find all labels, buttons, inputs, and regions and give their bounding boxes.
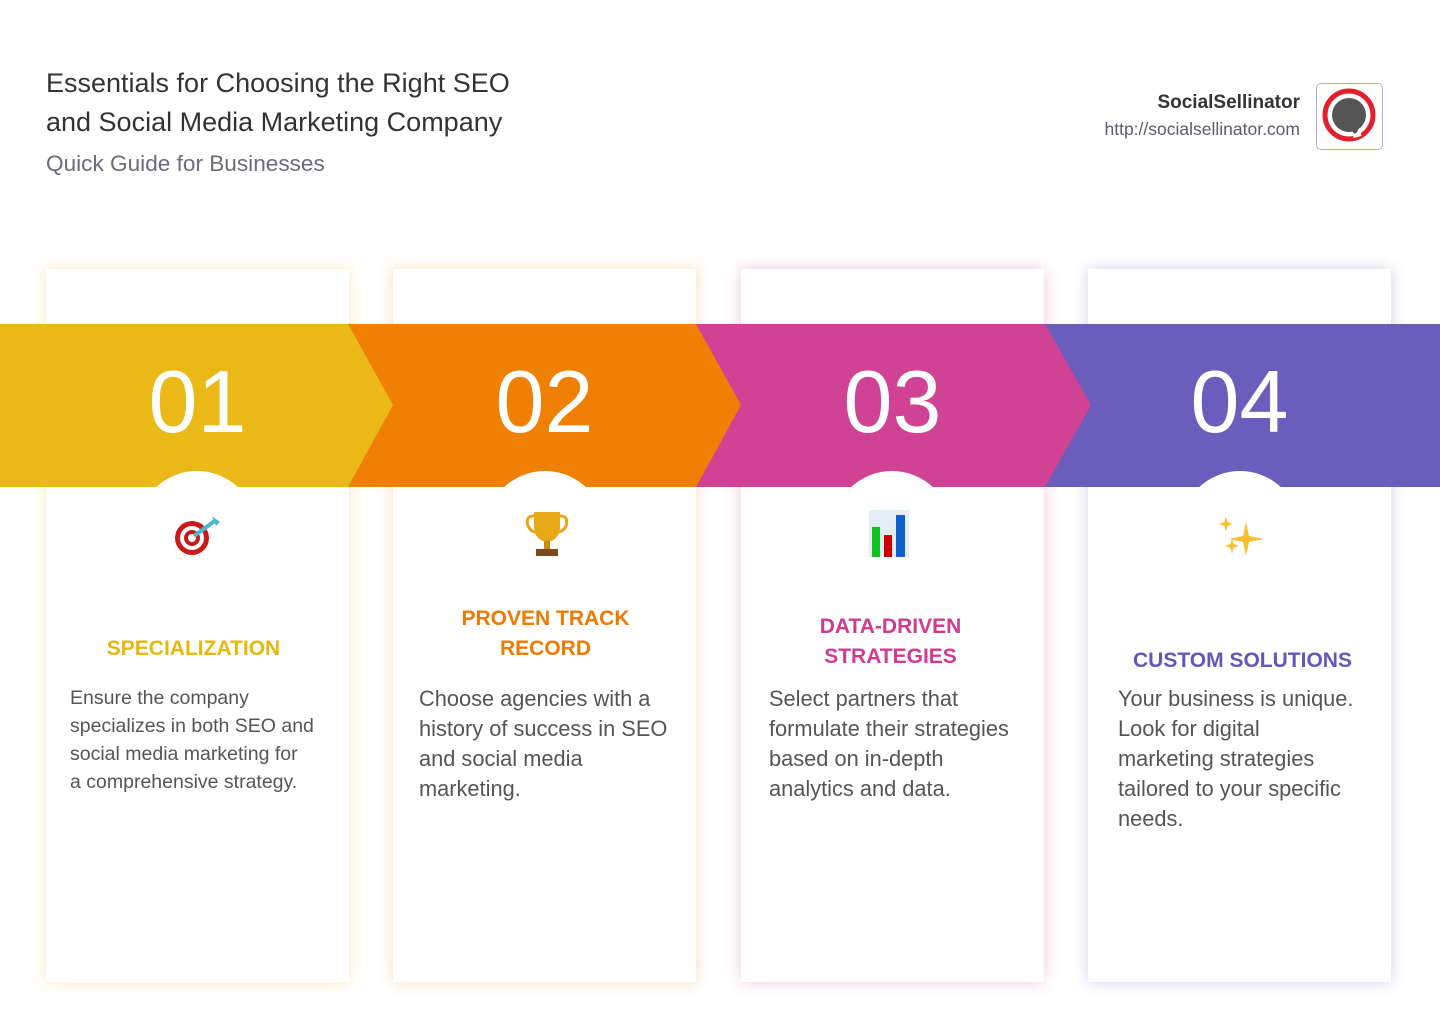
heading 2 [461,607,630,660]
heading 3: DATA-DRIVEN [820,615,961,638]
heading 3 [820,615,961,668]
body 3: based on in-depth [769,746,944,771]
title: and Social Media Marketing Company [46,107,502,137]
banner arrows [0,324,1440,487]
title [46,68,510,137]
title: Essentials for Choosing the Right SEO [46,68,510,98]
body 4 [1118,686,1354,831]
body 2 [419,686,667,801]
text: 04 [1191,352,1288,451]
body 2: and social media [419,746,583,771]
icon: bar chart [869,510,909,557]
body 3: formulate their strategies [769,716,1009,741]
body 3: analytics and data. [769,776,951,801]
icon: trophy [526,512,568,556]
cards [46,269,349,982]
body 4: Your business is unique. [1118,686,1354,711]
heading 1: SPECIALIZATION [107,637,280,660]
circles [137,471,257,591]
brand text [1104,92,1300,139]
body 2: marketing. [419,776,521,801]
icon: target [175,516,220,555]
body 4: marketing strategies [1118,746,1314,771]
body 3: Select partners that [769,686,958,711]
body 4: tailored to your specific [1118,776,1341,801]
body 3 [769,686,1009,801]
body 1: a comprehensive strategy. [70,771,297,793]
subtitle: Quick Guide for Businesses [46,151,325,176]
body 2: history of success in SEO [419,716,667,741]
text: 02 [496,352,593,451]
body 1: social media marketing for [70,743,298,765]
heading 2: RECORD [500,637,591,660]
numbers: 01 [149,352,246,451]
body 2: Choose agencies with a [419,686,650,711]
logo [1316,83,1383,150]
heading 3: STRATEGIES [824,645,957,668]
brand text: SocialSellinator [1157,92,1300,113]
body 1: specializes in both SEO and [70,715,314,737]
body 4: Look for digital [1118,716,1260,741]
heading 4: CUSTOM SOLUTIONS [1133,649,1352,672]
body 4: needs. [1118,806,1183,831]
heading 2: PROVEN TRACK [461,607,630,630]
body 1 [70,687,314,793]
icon: sparkles [1219,516,1264,556]
brand text: http://socialsellinator.com [1104,119,1300,139]
body 1: Ensure the company [70,687,249,709]
text: 03 [844,352,941,451]
